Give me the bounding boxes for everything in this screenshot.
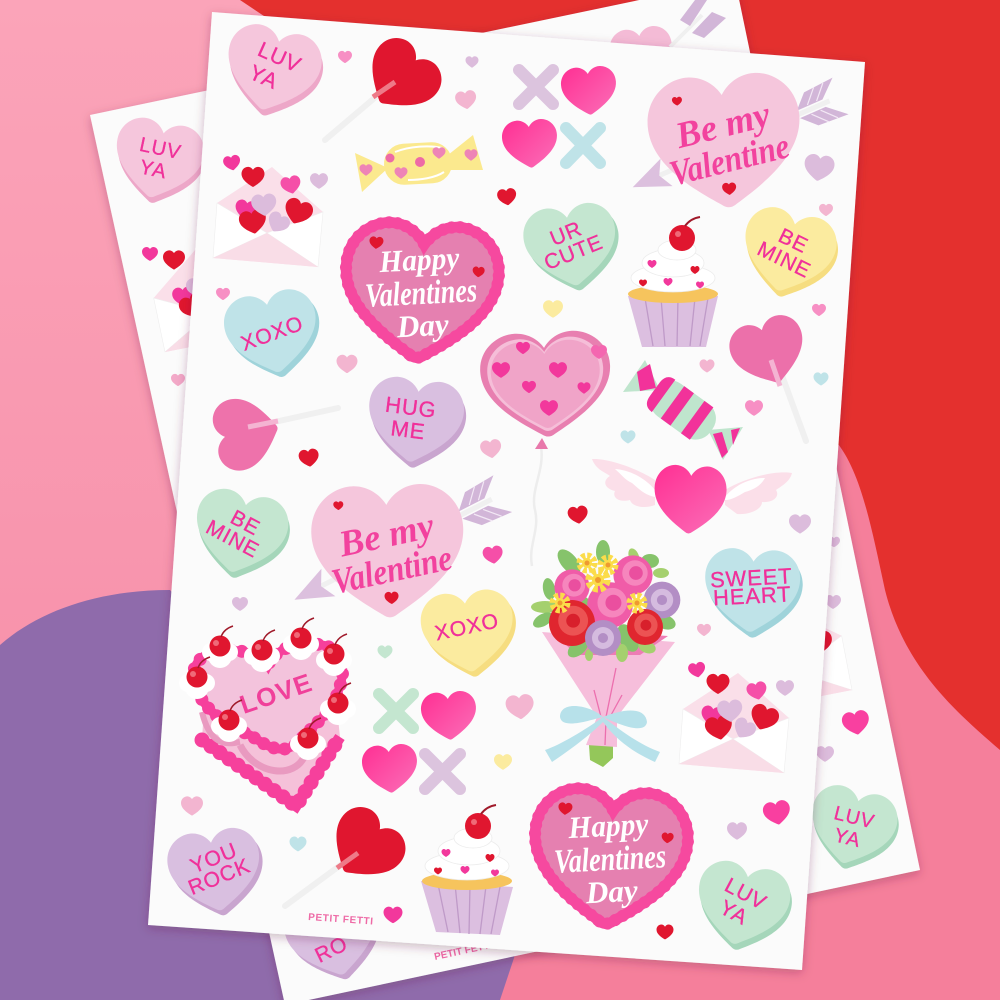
scalloped heart Happy Valentines Day top — [340, 220, 502, 363]
front sticker sheet — [148, 12, 865, 970]
candy heart HUG ME — [362, 374, 470, 473]
candy heart BE MINE green: MINE — [202, 516, 263, 563]
candy heart LUV YA pink: YA — [245, 59, 282, 94]
candy heart BE MINE yellow: MINE — [754, 237, 814, 283]
Be my Valentine heart lower: Be my — [335, 505, 438, 566]
candy heart XOXO yellow: XOXO — [433, 609, 501, 645]
back sheet: arrow — [670, 0, 726, 47]
scalloped heart Happy Valentines Day top: Valentines — [364, 272, 478, 315]
candy heart YOU ROCK — [164, 824, 270, 922]
scalloped heart Happy Valentines Day top: Happy — [377, 240, 460, 279]
winged heart — [592, 459, 792, 535]
candy heart HUG ME: ME — [389, 415, 427, 444]
candy heart XOXO blue: XOXO — [238, 312, 307, 356]
back sheet: candy heart purple — [279, 885, 391, 991]
back sheet: envelope left — [140, 234, 273, 361]
candy heart SWEET HEART: HEART — [712, 581, 792, 610]
candy heart YOU ROCK: YOU — [187, 839, 241, 878]
heart balloon — [478, 329, 614, 566]
back sheet: candy heart LUV YA green — [800, 780, 905, 879]
envelope lower — [679, 673, 789, 773]
candy heart XOXO yellow — [418, 587, 521, 682]
back sheet: candy heart LUV YA green: YA — [832, 824, 863, 852]
XO top group — [501, 65, 618, 170]
candy heart UR CUTE: CUTE — [541, 231, 606, 275]
candy heart LUV YA green: YA — [716, 896, 752, 930]
arrow behind top heart — [625, 78, 849, 206]
back sheet: small hearts — [142, 24, 871, 762]
cake LOVE text: LOVE — [236, 667, 316, 720]
candy heart XOXO blue — [220, 285, 328, 385]
back sheet: candy heart purple: RO — [311, 932, 352, 968]
candy heart BE MINE green — [186, 484, 296, 587]
candy heart BE MINE yellow — [732, 202, 845, 308]
back sheet: candy heart LUV YA pink: YA — [138, 156, 169, 184]
scalloped heart Happy Valentines Day lower: Day — [584, 873, 639, 910]
candy heart SWEET HEART: SWEET — [710, 563, 793, 592]
red lollipop top — [325, 29, 450, 140]
candy heart UR CUTE: UR — [547, 217, 585, 251]
Be my Valentine heart lower: Valentine — [328, 537, 456, 602]
candy heart HUG ME: HUG — [384, 392, 438, 423]
Be my Valentine heart top: Valentine — [665, 125, 793, 194]
red lollipop bottom — [285, 798, 414, 906]
pink lollipop right — [724, 310, 814, 441]
scalloped heart Happy Valentines Day lower: Valentines — [553, 838, 667, 881]
candy heart LUV YA pink — [215, 18, 330, 127]
candy heart YOU ROCK: ROCK — [185, 854, 254, 900]
brand label: PETIT FETTI — [308, 912, 374, 928]
lower envelope flying hearts — [687, 661, 794, 701]
striped wrapped candy — [623, 360, 743, 460]
back sheet: candy heart LUV YA pink — [106, 113, 212, 212]
envelope with hearts — [213, 167, 323, 267]
pink lollipop left — [210, 392, 338, 474]
Be my Valentine heart lower — [310, 483, 466, 620]
cupcake top — [628, 217, 718, 347]
candy heart BE MINE yellow: BE — [775, 224, 812, 258]
yellow wrapped candy — [355, 135, 483, 192]
small scattered hearts — [181, 51, 836, 939]
back sheet: candy heart LUV YA pink: LUV — [138, 134, 183, 164]
cupcake bottom — [421, 805, 513, 935]
back sheet: candy heart LUV YA green: LUV — [832, 802, 877, 833]
candy heart BE MINE green: BE — [227, 506, 264, 540]
XO lower group — [361, 690, 478, 795]
arrow behind lower heart — [285, 475, 512, 618]
envelope flying hearts — [222, 154, 328, 195]
scalloped heart Happy Valentines Day top: Day — [395, 307, 450, 344]
back sheet: envelope right — [724, 592, 857, 719]
flower bouquet — [530, 540, 680, 767]
candy heart UR CUTE — [520, 199, 626, 297]
candy heart LUV YA pink: LUV — [254, 37, 305, 78]
candy heart LUV YA green: LUV — [721, 874, 770, 915]
scalloped heart Happy Valentines Day lower: Happy — [566, 806, 649, 845]
scalloped heart Happy Valentines Day lower — [529, 786, 691, 929]
back sheet: brand: PETIT FETTI — [433, 940, 493, 963]
Be my Valentine heart top — [645, 70, 805, 213]
candy heart LUV YA green — [688, 856, 798, 959]
Be my Valentine heart top: Be my — [671, 94, 775, 157]
heart layer cake with cherries — [179, 618, 356, 810]
candy heart SWEET HEART — [702, 547, 804, 640]
